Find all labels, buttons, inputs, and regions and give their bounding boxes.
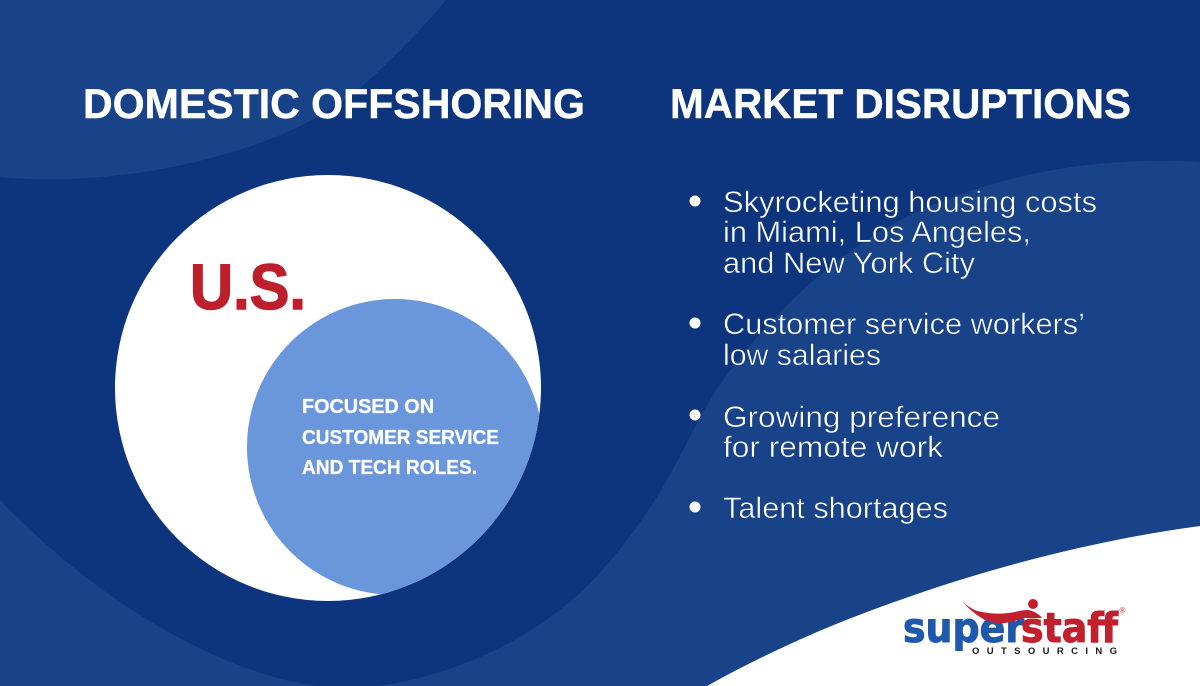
logo wordmark: staff: staff xyxy=(1021,604,1119,652)
inner circle xyxy=(247,299,543,595)
logo figure head xyxy=(1028,599,1038,609)
bullet list: market disruptions xyxy=(690,186,1097,525)
background shape: top-left arc xyxy=(0,0,446,179)
inner circle text: AND TECH ROLES. xyxy=(302,457,477,479)
inner circle text xyxy=(302,396,499,479)
bullet: remote work xyxy=(690,401,1000,464)
bullet: talent shortages: Talent shortages xyxy=(723,492,948,525)
logo: SuperStaff Outsourcing xyxy=(903,599,1126,657)
logo registered mark: ® xyxy=(1120,606,1126,615)
logo tagline: OUTSOURCING xyxy=(972,646,1117,657)
inner circle text: FOCUSED ON xyxy=(302,396,434,418)
logo swoosh xyxy=(963,602,1042,623)
logo wordmark: super: super xyxy=(903,604,1025,652)
bullet: housing costs: in Miami, Los Angeles, xyxy=(723,216,1031,249)
heading: domestic offshoring: DOMESTIC OFFSHORING xyxy=(83,80,585,127)
bullet: remote work: Growing preference xyxy=(723,401,1000,434)
background shape: white corner xyxy=(707,526,1200,686)
heading: market disruptions: MARKET DISRUPTIONS xyxy=(670,80,1131,127)
label: U.S.: U.S. xyxy=(190,251,306,323)
outer circle xyxy=(115,175,541,601)
bullet: remote work: for remote work xyxy=(723,431,944,464)
bullet: housing costs: Skyrocketing housing costs xyxy=(723,186,1097,219)
bullet: housing costs xyxy=(690,186,1097,280)
bullet: low salaries xyxy=(690,308,1085,372)
inner circle text: CUSTOMER SERVICE xyxy=(302,427,499,449)
background shape: lower sweep xyxy=(0,161,1200,686)
venn diagram: U.S. circle with nested segment xyxy=(115,175,543,601)
bullet: low salaries: Customer service workers’ xyxy=(723,308,1085,341)
bullet: housing costs: and New York City xyxy=(723,247,975,280)
bullet: low salaries: low salaries xyxy=(723,339,881,372)
